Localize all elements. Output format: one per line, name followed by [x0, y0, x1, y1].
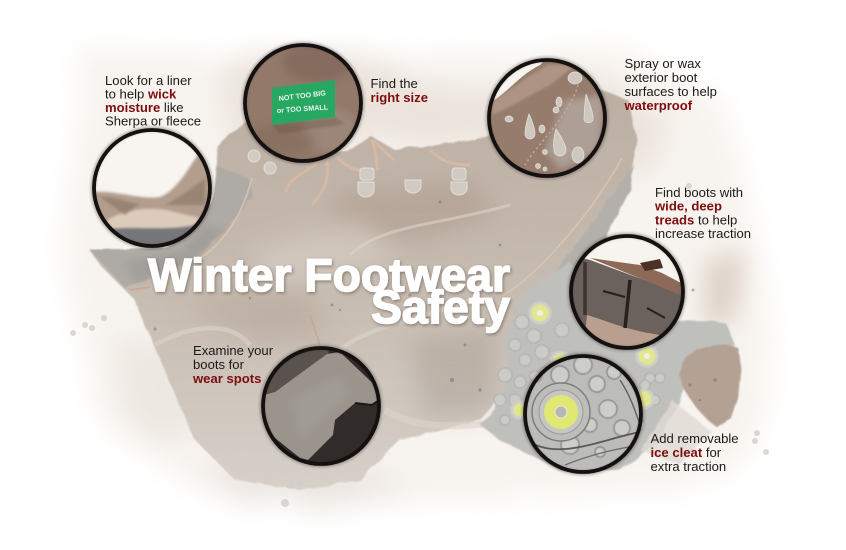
text: treads tip: Find boots with: [655, 185, 743, 200]
text: waterproof tip: surfaces to help: [624, 84, 717, 99]
text: waterproof tip: Spray or wax: [624, 56, 701, 71]
title: Winter Footwear: [148, 249, 510, 301]
title: [148, 249, 510, 333]
boot upper: [90, 85, 637, 490]
text: size tip: Find the: [370, 76, 418, 91]
watercolor background wash: [65, 50, 775, 505]
text: treads tip: treads to help: [655, 212, 737, 228]
outer sole band: [515, 165, 634, 322]
sole cleats: [512, 303, 657, 418]
green label: or TOO SMALL: [277, 102, 329, 115]
text: cleat tip: ice cleat for: [650, 445, 721, 460]
text: liner tip: moisture like: [105, 100, 184, 115]
text: treads tip: wide, deep: [654, 198, 722, 214]
boot cuff: [90, 166, 252, 288]
water droplets: [505, 72, 593, 171]
title: Safety: [371, 281, 510, 333]
inset circle: size label: [244, 42, 362, 162]
boot illustration: [70, 85, 769, 507]
text: waterproof tip: waterproof: [624, 98, 693, 113]
boot stitching and seams: [130, 158, 622, 345]
text: liner tip: Sherpa or fleece: [105, 114, 201, 128]
text: cleat tip: extra traction: [650, 459, 726, 474]
paint speckles: [154, 200, 717, 401]
text: waterproof tip: exterior boot: [624, 70, 698, 85]
inset circle: ice cleat: [524, 355, 642, 473]
text: treads tip: increase traction: [655, 226, 751, 241]
inset circle: wear spots: [262, 340, 385, 465]
text: wear tip: boots for: [193, 357, 245, 372]
text: liner tip: Look for a liner: [105, 73, 192, 88]
green label: NOT TOO BIG: [278, 88, 327, 103]
sole studs: [494, 315, 665, 430]
text: size tip: right size: [370, 90, 428, 105]
boot eyelets: [248, 150, 467, 197]
toe patch: [640, 400, 712, 465]
ice cleat sole: [480, 262, 735, 470]
boot laces: [286, 140, 470, 205]
green label: [272, 80, 335, 125]
text: wear tip: Examine your: [193, 343, 274, 358]
text: cleat tip: Add removable: [650, 431, 739, 446]
inset circle: boot liner: [90, 129, 215, 250]
inset circle: boot treads: [570, 235, 685, 350]
text: wear tip: wear spots: [192, 371, 261, 386]
inset circle: waterproof droplets: [480, 59, 606, 177]
text: liner tip: to help wick: [105, 86, 176, 102]
